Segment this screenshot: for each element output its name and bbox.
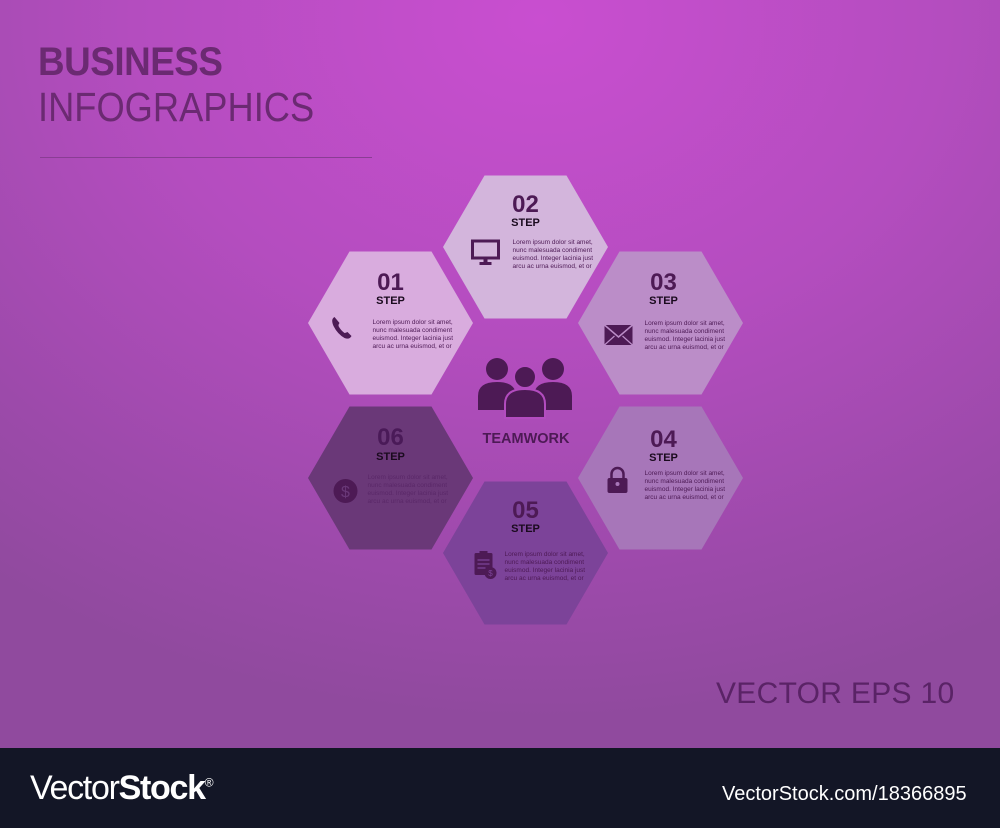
hex 03: Lorem ipsum dolor sit amet,	[644, 320, 725, 327]
hex 06	[308, 406, 473, 550]
icon: dollar coin	[334, 479, 358, 503]
hex 04: nunc malesuada condiment	[644, 478, 724, 485]
title: INFOGRAPHICS	[38, 84, 314, 130]
icon: dollar coin: $	[341, 484, 350, 501]
icon: envelope	[604, 325, 632, 345]
hex 06: euismod. Integer lacinia just	[368, 490, 448, 497]
hex 04: arcu ac urna euismod, et or	[644, 494, 724, 501]
hex 06: 06	[377, 424, 404, 451]
hex 04: 04	[650, 426, 677, 453]
hex 03	[578, 252, 743, 394]
hex 01	[308, 252, 473, 394]
hex 05: arcu ac urna euismod, et or	[504, 575, 584, 582]
hex 02	[443, 176, 608, 318]
hex 05: 05	[512, 497, 539, 524]
hex 03: nunc malesuada condiment	[644, 328, 724, 335]
footer bar: VectorStock.com/18366895	[722, 783, 967, 805]
icon: clipboard with coin: $	[488, 569, 493, 578]
footer bar: VectorStock®	[30, 769, 212, 807]
center: teamwork: TEAMWORK	[482, 431, 570, 447]
title	[38, 40, 372, 158]
hex 02: 02	[512, 191, 539, 218]
hex 01: Lorem ipsum dolor sit amet,	[372, 319, 453, 326]
hex 02: euismod. Integer lacinia just	[512, 255, 593, 262]
hex 03: arcu ac urna euismod, et or	[644, 344, 724, 351]
hex 01: nunc malesuada condiment	[372, 327, 452, 334]
hex 03: euismod. Integer lacinia just	[644, 336, 725, 343]
hex 01: STEP	[376, 295, 405, 307]
hex 04: STEP	[649, 452, 678, 464]
center: teamwork	[478, 358, 572, 447]
hex 02: Lorem ipsum dolor sit amet,	[512, 239, 593, 246]
icon: monitor	[472, 241, 498, 265]
icon: team	[478, 358, 572, 418]
hex 01: euismod. Integer lacinia just	[372, 335, 453, 342]
hex 04: euismod. Integer lacinia just	[644, 486, 725, 493]
hex 06: nunc malesuada condiment	[368, 482, 447, 489]
hex 05: STEP	[511, 523, 540, 535]
hex 03: STEP	[649, 295, 678, 307]
hex 04: Lorem ipsum dolor sit amet,	[644, 470, 725, 477]
hex 05	[443, 482, 608, 624]
icon: clipboard with coin	[474, 551, 496, 579]
hex 03: 03	[650, 269, 677, 296]
hex 05: nunc malesuada condiment	[504, 559, 584, 566]
hex 06: STEP	[376, 451, 405, 463]
footer bar	[0, 748, 1000, 828]
hex 06: Lorem ipsum dolor sit amet,	[368, 474, 448, 481]
hex 01: arcu ac urna euismod, et or	[372, 343, 452, 350]
hex 02: arcu ac urna euismod, et or	[512, 263, 592, 270]
icon: phone	[332, 317, 352, 339]
vector eps label: VECTOR EPS 10	[716, 677, 954, 710]
hex 01: 01	[377, 269, 404, 296]
title: BUSINESS	[38, 40, 222, 84]
hex 06: arcu ac urna euismod, et or	[368, 498, 447, 505]
hex 05: euismod. Integer lacinia just	[504, 567, 585, 574]
hex 02: STEP	[511, 217, 540, 229]
hex 04	[578, 406, 743, 550]
icon: padlock	[608, 468, 628, 493]
hex 02: nunc malesuada condiment	[512, 247, 592, 254]
hex 05: Lorem ipsum dolor sit amet,	[504, 551, 585, 558]
